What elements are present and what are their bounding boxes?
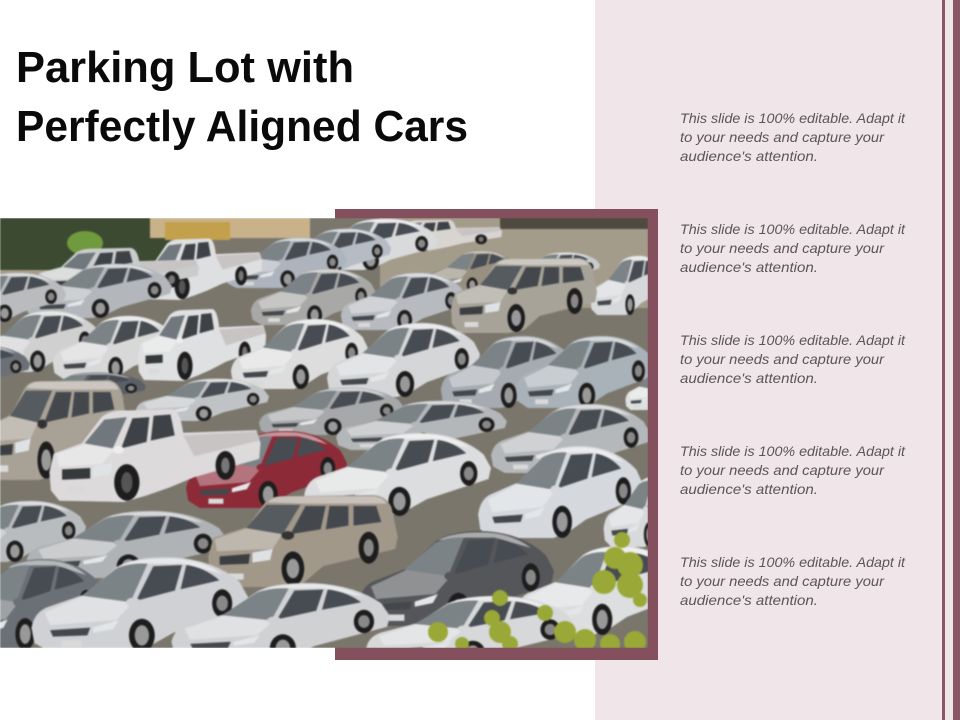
title — [16, 43, 468, 151]
text block 3: This slide is 100% editable. Adapt it — [680, 332, 906, 348]
sidebar text blocks — [680, 110, 906, 608]
text block 1: to your needs and capture your — [680, 129, 885, 145]
text block 3: to your needs and capture your — [680, 351, 885, 367]
text block 4: This slide is 100% editable. Adapt it — [680, 443, 906, 459]
text block 1 — [680, 110, 906, 164]
thin vertical accent line — [942, 0, 945, 720]
text block 5 — [680, 554, 906, 608]
title: Parking Lot with — [16, 43, 354, 92]
text block 1: This slide is 100% editable. Adapt it — [680, 110, 906, 126]
background: far lot, trees and yard — [0, 218, 648, 308]
text block 3: audience's attention. — [680, 370, 818, 386]
text block 5: audience's attention. — [680, 592, 818, 608]
panel: right tinted sidebar — [595, 0, 960, 720]
text block 2: audience's attention. — [680, 259, 818, 275]
photo: parking lot full of cars — [0, 218, 648, 648]
text block 4 — [680, 443, 906, 497]
text block 2: This slide is 100% editable. Adapt it — [680, 221, 906, 237]
thick vertical accent bar — [953, 0, 960, 720]
text block 5: This slide is 100% editable. Adapt it — [680, 554, 906, 570]
text block 5: to your needs and capture your — [680, 573, 885, 589]
young trees in foreground — [428, 532, 647, 654]
text block 2 — [680, 221, 906, 275]
text block 1: audience's attention. — [680, 148, 818, 164]
title: Perfectly Aligned Cars — [16, 102, 468, 151]
text block 4: audience's attention. — [680, 481, 818, 497]
cars: front rows — [0, 495, 685, 665]
photo frame — [335, 209, 658, 660]
text block 3 — [680, 332, 906, 386]
text block 2: to your needs and capture your — [680, 240, 885, 256]
ground — [0, 218, 648, 648]
cars: second row — [0, 309, 685, 410]
cars: third row — [0, 346, 693, 547]
cars: back row — [0, 219, 668, 333]
text block 4: to your needs and capture your — [680, 462, 885, 478]
